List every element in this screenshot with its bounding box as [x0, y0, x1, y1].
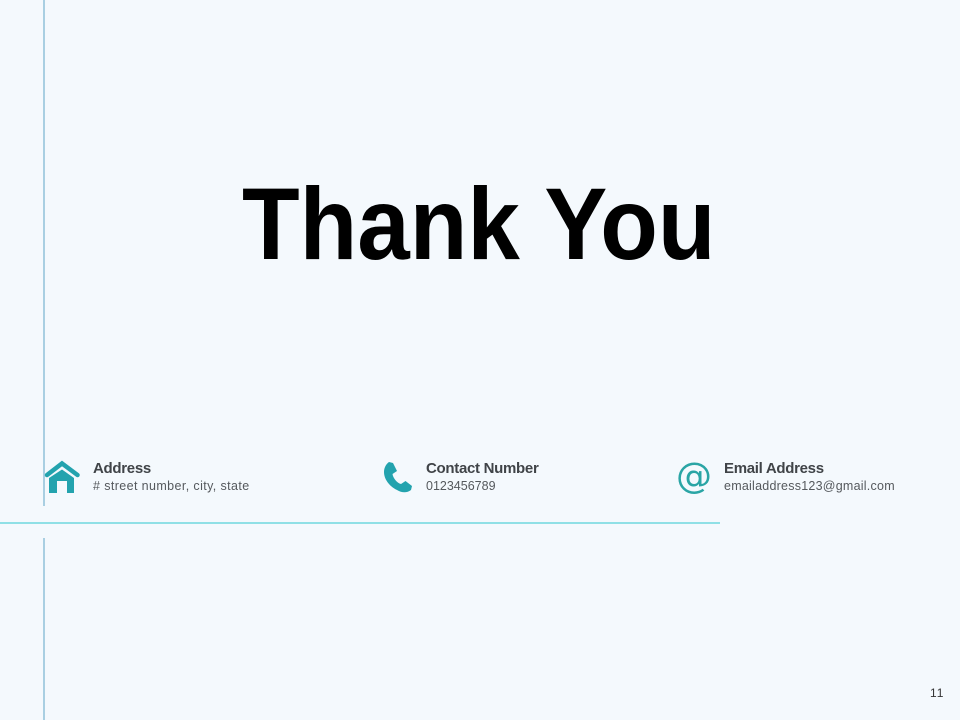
page number: 11 — [930, 686, 944, 700]
icon: house — [44, 460, 80, 493]
contact: address — [44, 460, 250, 493]
heading: phone: Contact Number — [426, 460, 538, 477]
text: address value: # street number, city, state — [93, 479, 250, 493]
title: Thank You — [242, 167, 716, 281]
icon: at sign: @ — [676, 456, 712, 497]
heading: email: Email Address — [724, 460, 824, 477]
heading: address: Address — [93, 460, 151, 477]
text: email value: emailaddress123@gmail.com — [724, 479, 895, 493]
contact: email — [676, 456, 895, 497]
text: phone value: 0123456789 — [426, 479, 496, 493]
icon: phone — [384, 462, 412, 492]
contact: phone — [384, 460, 539, 493]
